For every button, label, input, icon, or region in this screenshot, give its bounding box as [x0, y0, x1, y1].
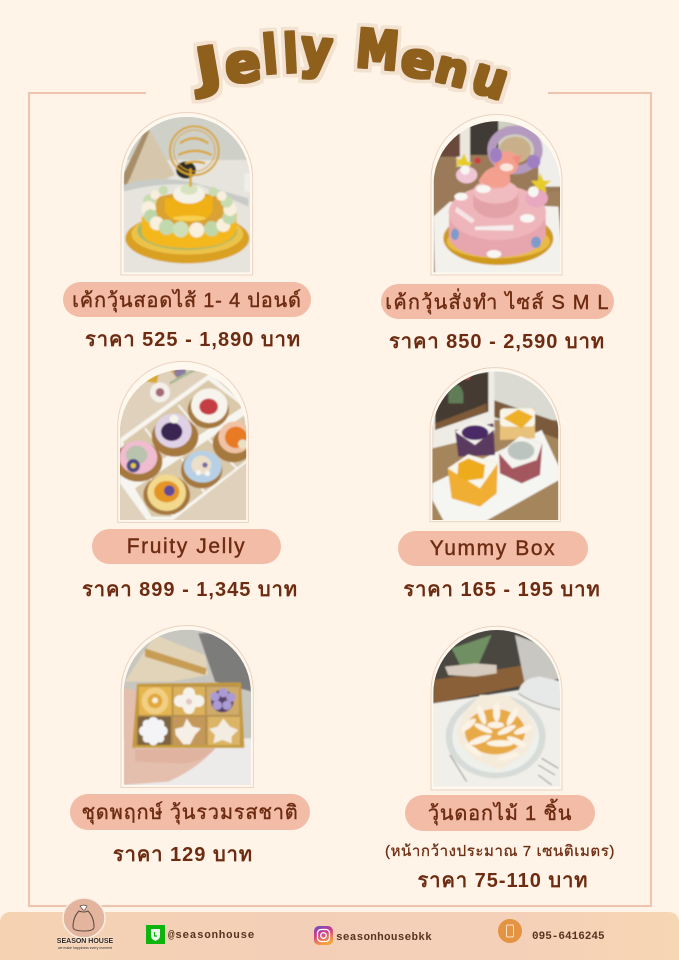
- pill heading: cake 1-4 pounds: [63, 282, 311, 317]
- Instagram handle: seasonhousebkk: [336, 932, 432, 944]
- title: Jelly Menu: [186, 17, 516, 112]
- pill heading: Yummy Box: [398, 531, 588, 566]
- photo: birthday mango jelly cake: [120, 112, 254, 276]
- pill heading: custom cake S M L: [381, 284, 614, 319]
- pill heading: Fruity Jelly: [92, 529, 281, 564]
- price: 129: ราคา 129 บาท: [113, 844, 253, 866]
- price: 75-110: ราคา 75-110 บาท: [418, 870, 588, 892]
- title: Jelly Menu: l: [260, 24, 280, 87]
- title: Jelly Menu: M: [354, 18, 401, 83]
- icon: LINE: [146, 925, 165, 944]
- pill heading: chudpruek mixed flavours: ชุดพฤกษ์ วุ้นรวมรสชาติ: [81, 802, 299, 824]
- title: Jelly Menu: y: [298, 17, 335, 81]
- photo: fruity jelly box: [117, 360, 249, 523]
- title: Jelly Menu: l: [282, 23, 300, 86]
- pill heading: Fruity Jelly: Fruity Jelly: [127, 534, 246, 558]
- pill heading: flower jelly 1 piece: วุ้นดอกไม้ 1 ชิ้น: [428, 803, 572, 825]
- phone number: 095-6416245: [532, 931, 605, 943]
- icon: phone: [498, 919, 522, 943]
- title: Jelly Menu: n: [430, 39, 475, 99]
- pill heading: Yummy Box: Yummy Box: [430, 536, 556, 560]
- price: 525-1,890: ราคา 525 - 1,890 บาท: [85, 329, 301, 351]
- logo: Season House: SEASON HOUSE: [57, 938, 113, 945]
- pill heading: cake 1-4 pounds: เค้กวุ้นสอดไส้ 1- 4 ปอนด์: [72, 290, 302, 312]
- pill heading: flower jelly 1 piece: [405, 795, 595, 831]
- photo: peony flower jelly: [430, 626, 562, 790]
- pill heading: custom cake S M L: เค้กวุ้นสั่งทำ ไซส์ S M L: [385, 292, 610, 314]
- LINE handle: @seasonhouse: [168, 930, 255, 942]
- page frame: [28, 92, 652, 907]
- note: width about 7 cm: (หน้ากว้างประมาณ 7 เซนติเมตร): [385, 843, 615, 860]
- icon: Instagram: [314, 926, 333, 945]
- logo: Season House: [56, 898, 114, 950]
- footer band: [0, 912, 679, 960]
- photo: flower jelly set: [120, 625, 254, 788]
- title: Jelly Menu: u: [465, 45, 516, 112]
- pill heading: chudpruek mixed flavours: [70, 794, 310, 830]
- price: 850-2,590: ราคา 850 - 2,590 บาท: [389, 331, 605, 353]
- title: Jelly Menu: J: [186, 34, 227, 101]
- logo: Season House: we make happiness every moment: [58, 946, 112, 950]
- photo: yummy box cubes: [430, 367, 561, 522]
- title: Jelly Menu: e: [220, 30, 265, 97]
- title: Jelly Menu: e: [396, 29, 441, 92]
- price: 899-1,345: ราคา 899 - 1,345 บาท: [82, 579, 298, 601]
- photo: pink fox custom cake: [430, 114, 562, 276]
- price: 165-195: ราคา 165 - 195 บาท: [403, 579, 601, 601]
